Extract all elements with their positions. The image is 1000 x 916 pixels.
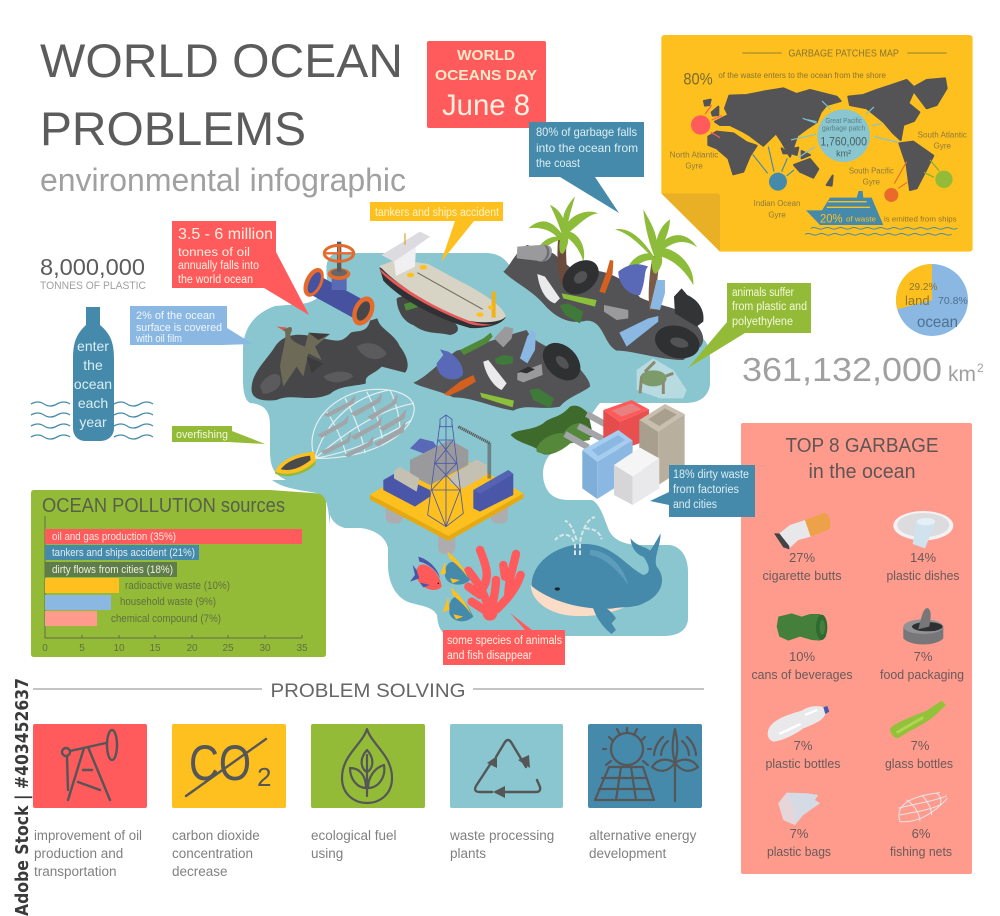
- callout: dirty waste: [650, 465, 755, 517]
- bar chart: 15: [149, 643, 161, 654]
- callout: species disappear: [443, 613, 565, 665]
- icon: oil platform: [370, 415, 523, 554]
- stock side label: Adobe Stock | #403452637: [12, 678, 33, 916]
- solution: oil production: [33, 724, 147, 879]
- callout: oil film: 2% of the ocean: [136, 310, 215, 322]
- icon: plastic bag: [778, 793, 820, 825]
- gyre labels: South Pacific: [849, 166, 894, 175]
- garbage labels: food packaging: [880, 667, 964, 682]
- callout: garbage from the coast: the coast: [536, 156, 581, 170]
- solution: waste processing: waste processing: [449, 828, 554, 843]
- callout: garbage from the coast: [529, 122, 644, 213]
- garbage labels: plastic bottles: [766, 756, 841, 771]
- callout: oil per year: the world ocean: [178, 274, 253, 286]
- garbage labels: [752, 550, 964, 859]
- gyre labels: [670, 130, 967, 219]
- bar chart: oil and gas production (35%): [52, 531, 176, 543]
- world map: [704, 78, 947, 190]
- garbage labels: 7%: [911, 738, 930, 753]
- oil slick with bird: [252, 318, 408, 400]
- icon: factories with sludge: [511, 400, 685, 505]
- garbage island centre: [413, 327, 590, 411]
- panel: garbage patches map: of the waste enters to the ocean from the shore: [718, 70, 886, 80]
- bar chart: 35: [296, 643, 308, 654]
- bar chart: tankers and ships accident (21%): [52, 547, 195, 559]
- solution: ecological fuel: [311, 724, 425, 861]
- pie chart: land and ocean: 29.2%: [909, 282, 937, 293]
- bar chart: household waste (9%): [120, 596, 216, 608]
- callout: tankers and ships accident: [370, 202, 503, 262]
- icon: bottle with waves: year: [79, 414, 107, 430]
- bar chart: 25: [222, 643, 234, 654]
- icon: glass bottle: [890, 701, 946, 738]
- tonnes of plastic stat: [40, 254, 146, 292]
- callout: animals suffer: polyethylene: [732, 316, 793, 328]
- solution: oil production: improvement of oil: [34, 828, 142, 843]
- tonnes of plastic stat: 8,000,000: [40, 254, 145, 280]
- panel: top 8 garbage: in the ocean: [808, 461, 916, 483]
- callout: oil per year: tonnes of oil: [178, 247, 250, 259]
- icon: turtle in plastic bag: [637, 358, 687, 398]
- panel: garbage patches map: GARBAGE PATCHES MAP: [788, 49, 899, 60]
- garbage island top right with palms: [503, 197, 704, 363]
- bar chart: [42, 516, 308, 654]
- icon: plastic bottle: [768, 706, 829, 742]
- callout: species disappear: and fish disappear: [447, 650, 532, 662]
- garbage labels: fishing nets: [890, 844, 952, 859]
- icon: palm trees: [528, 197, 697, 310]
- gyre labels: Gyre: [685, 162, 703, 171]
- solution: carbon dioxide: carbon dioxide: [172, 828, 260, 843]
- callout: oil film: surface is covered: [136, 322, 222, 334]
- callout: oil film: [130, 306, 253, 345]
- icon: bottle with waves: the: [83, 357, 103, 373]
- callout: world oceans day: OCEANS DAY: [435, 67, 537, 84]
- bar chart: chemical compound (7%): [111, 613, 221, 625]
- heading: problem solving: PROBLEM SOLVING: [270, 681, 466, 702]
- callout: oil per year: 3.5 - 6 million: [178, 226, 273, 243]
- title: PROBLEMS: [40, 102, 306, 155]
- arrows: [705, 101, 939, 188]
- bar chart: 5: [79, 643, 85, 654]
- solution: waste processing: [449, 724, 563, 861]
- panel: ocean pollution sources: [31, 480, 330, 657]
- solution: ecological fuel: using: [311, 846, 343, 861]
- title: WORLD OCEAN: [40, 34, 403, 87]
- panel: top 8 garbage: [741, 423, 972, 874]
- icon: crushed can: [777, 613, 827, 641]
- panel: garbage patches map: [661, 35, 973, 252]
- icon: fishing net with boat: [275, 389, 414, 476]
- callout: garbage from the coast: into the ocean from: [536, 141, 638, 155]
- solution: alternative energy: development: [589, 846, 667, 861]
- solution: waste processing: plants: [450, 846, 486, 861]
- icon: ship with 20 percent: [805, 191, 957, 235]
- solution: carbon dioxide: [172, 724, 286, 879]
- pie chart: land and ocean: land: [905, 293, 930, 308]
- solution: carbon dioxide: concentration: [172, 846, 253, 861]
- gyre labels: Gyre: [863, 178, 881, 187]
- icon: ship with 20 percent: is emitted from ships: [884, 215, 957, 224]
- garbage labels: 7%: [790, 826, 809, 841]
- gyre labels: South Atlantic: [918, 130, 967, 139]
- callout: animals suffer: [688, 283, 811, 368]
- ocean background: [243, 253, 710, 636]
- callout: world oceans day: June 8: [442, 89, 530, 122]
- icon: bottle with waves: each: [78, 395, 108, 411]
- icon: food can: [903, 608, 943, 645]
- bar chart: 10: [113, 643, 125, 654]
- solution: alternative energy: alternative energy: [589, 828, 697, 843]
- callout: dirty waste: 18% dirty waste: [673, 469, 749, 481]
- panel: garbage patches map: 80%: [683, 69, 713, 88]
- bar chart: 30: [259, 643, 271, 654]
- panel: top 8 garbage: TOP 8 GARBAGE: [786, 435, 938, 457]
- pie chart: land and ocean: [896, 264, 968, 336]
- solution: carbon dioxide: CO: [189, 735, 251, 791]
- garbage labels: glass bottles: [885, 756, 953, 771]
- gyre labels: Gyre: [768, 210, 786, 219]
- icon: tanker ship with spill: [379, 232, 506, 335]
- garbage labels: cans of beverages: [752, 667, 853, 682]
- icon: fishing net: [898, 793, 947, 822]
- icon: tropical fish and coral: [410, 550, 521, 621]
- callout: tankers and ships accident: tankers and ships accident: [375, 207, 500, 219]
- garbage labels: 27%: [789, 550, 815, 565]
- gyre labels: North Atlantic: [670, 150, 718, 159]
- callout: garbage from the coast: 80% of garbage falls: [536, 125, 637, 139]
- callout: animals suffer: animals suffer: [732, 287, 794, 299]
- icon: ship with 20 percent: 20%: [820, 212, 843, 225]
- icon: leaking pipe with valve: [299, 242, 379, 329]
- bar chart: radioactive waste (10%): [125, 580, 230, 592]
- callout: dirty waste: and cities: [673, 499, 717, 511]
- icon: ship with 20 percent: of waste: [846, 215, 876, 224]
- icon: oiled cormorant: [277, 327, 330, 387]
- bar chart: dirty flows from cities (18%): [52, 564, 173, 576]
- solution: oil production: transportation: [34, 864, 117, 879]
- solution: ecological fuel: ecological fuel: [311, 828, 397, 843]
- gyres: km²: [836, 149, 851, 159]
- gyres: 1,760,000: [820, 136, 867, 149]
- callout: oil per year: annually falls into: [178, 260, 259, 272]
- garbage labels: 14%: [910, 550, 936, 565]
- title: environmental infographic: [40, 162, 406, 198]
- callout: oil film: with oil film: [135, 333, 182, 345]
- callout: dirty waste: from factories: [673, 484, 739, 496]
- gyre labels: Gyre: [934, 142, 952, 151]
- callout: world oceans day: WORLD: [457, 47, 515, 64]
- solution: alternative energy: [588, 724, 702, 861]
- callout: overfishing: overfishing: [176, 429, 228, 441]
- earth surface area stat: 361,132,000: [742, 351, 942, 388]
- title: [40, 34, 406, 198]
- garbage labels: cigarette butts: [762, 568, 842, 583]
- solution: carbon dioxide: decrease: [172, 864, 228, 879]
- icon: bottle with waves: ocean: [74, 376, 112, 392]
- gyres: Great Pacific: [825, 118, 862, 125]
- callout: species disappear: some species of animals: [447, 635, 562, 647]
- garbage labels: 7%: [914, 649, 933, 664]
- icon: bottle with waves: [31, 307, 153, 441]
- icon: whale: [531, 517, 662, 634]
- solution: carbon dioxide: 2: [257, 762, 271, 792]
- gyres: garbage patch: [822, 126, 865, 133]
- callout: animals suffer: from plastic and: [732, 301, 807, 313]
- solution: oil production: production and: [34, 846, 123, 861]
- gyre labels: Indian Ocean: [754, 199, 800, 208]
- earth surface area stat: 2: [977, 361, 984, 375]
- earth surface area stat: km: [948, 363, 976, 386]
- panel: ocean pollution sources: OCEAN POLLUTION sources: [42, 495, 285, 517]
- garbage labels: 10%: [789, 649, 815, 664]
- icon: bottle with waves: enter: [77, 338, 109, 354]
- pie chart: land and ocean: ocean: [917, 314, 958, 331]
- icon: cigarette butt: [774, 513, 831, 549]
- bar chart: 20: [186, 643, 198, 654]
- tonnes of plastic stat: TONNES OF PLASTIC: [40, 280, 146, 292]
- icon: plastic dish: [893, 511, 953, 548]
- callout: oil per year: [172, 221, 309, 315]
- garbage labels: plastic dishes: [886, 568, 960, 583]
- garbage labels: plastic bags: [767, 844, 831, 859]
- garbage labels: 6%: [912, 826, 931, 841]
- garbage labels: 7%: [794, 738, 813, 753]
- gyres: [691, 109, 953, 202]
- bar chart: 0: [42, 643, 48, 654]
- callout: overfishing: [172, 426, 265, 444]
- callout: world oceans day: [427, 41, 546, 128]
- pie chart: land and ocean: 70.8%: [938, 295, 968, 307]
